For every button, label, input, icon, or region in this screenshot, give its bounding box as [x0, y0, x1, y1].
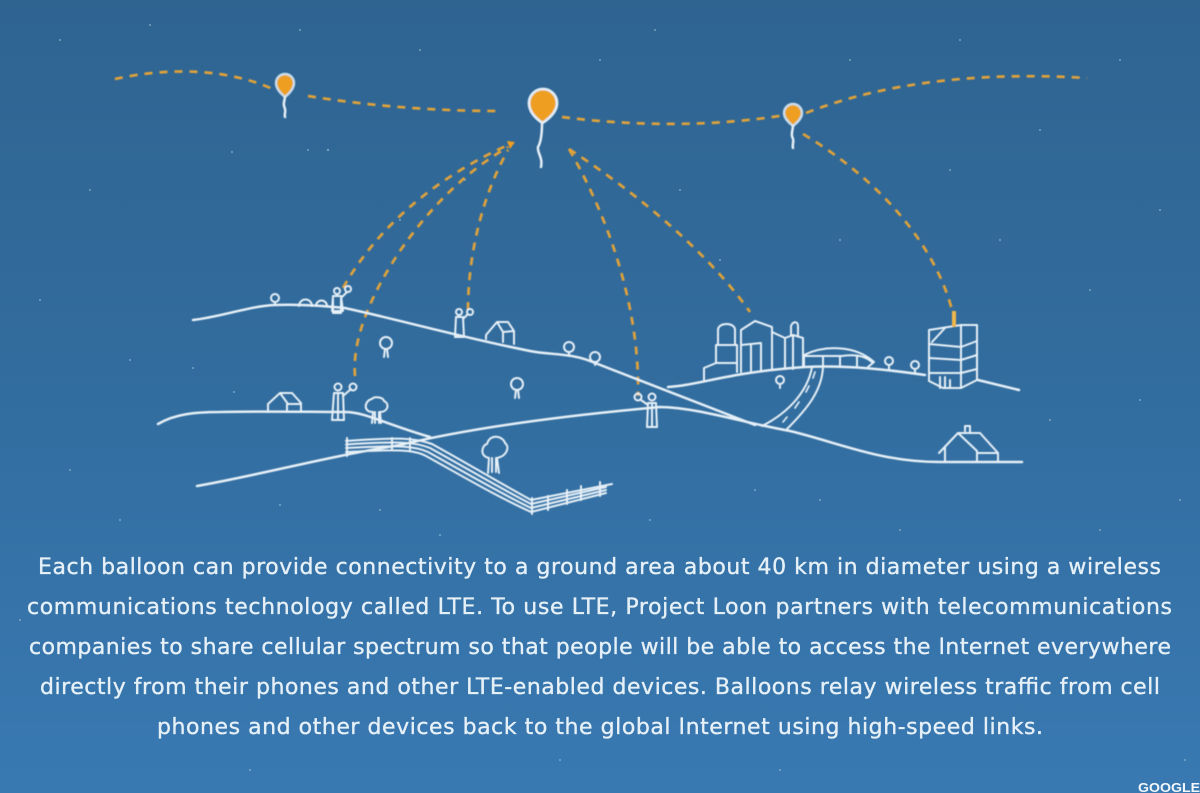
fence	[346, 438, 612, 514]
house: left	[268, 393, 301, 412]
huts on upper hill	[299, 299, 327, 306]
description text: phones and other devices back to the global Internet using high-speed links.	[157, 715, 1043, 740]
dashed link: ground to balloon	[343, 134, 952, 396]
house: right	[939, 426, 998, 462]
person: upper left	[332, 286, 351, 313]
hills	[158, 305, 1022, 486]
house: upper hill	[486, 322, 514, 344]
description text	[27, 555, 1172, 740]
tower building	[929, 325, 977, 388]
road	[762, 367, 823, 429]
description text: directly from their phones and other LTE-enabled devices. Balloons relay wireless traffic from cell	[40, 675, 1160, 700]
antenna	[952, 311, 956, 327]
balloon: centre	[529, 89, 557, 167]
description text: Each balloon can provide connectivity to a ground area about 40 km in diameter using a wireless	[38, 555, 1161, 580]
person: lower left	[332, 384, 356, 420]
city skyline	[704, 321, 803, 380]
arrow tip	[507, 141, 515, 149]
description text: communications technology called LTE. To use LTE, Project Loon partners with telecommunications	[27, 595, 1172, 620]
stadium bridge	[804, 348, 874, 367]
large trees	[366, 397, 507, 473]
balloon: left	[276, 74, 294, 117]
person: upper middle	[455, 309, 473, 337]
person: centre	[634, 394, 657, 427]
small trees	[271, 294, 919, 398]
illustration	[115, 71, 1087, 514]
balloon: right	[784, 104, 802, 148]
description text: companies to share cellular spectrum so that people will be able to access the Internet everywhere	[29, 635, 1171, 660]
dashed link: balloon relay path	[115, 71, 1087, 124]
